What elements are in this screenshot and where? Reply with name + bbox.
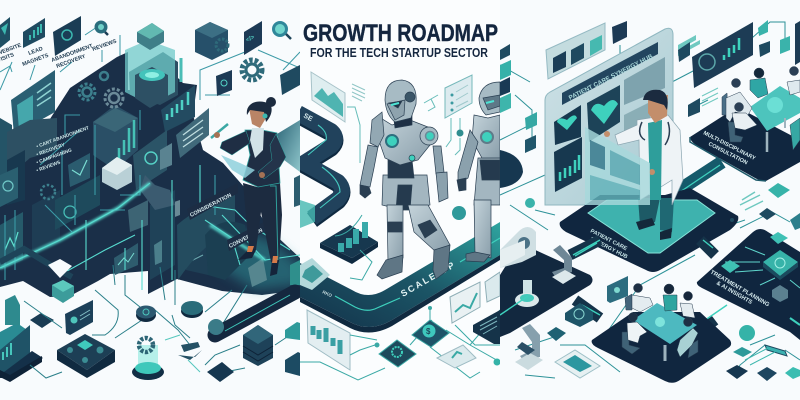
funnel band: cart abandonment list: • CAMPAIGNING [36,147,73,166]
table: consultation [750,86,800,152]
banner: patient care synergy hub: PATIENT CARE SYNERGY HUB [568,53,655,102]
sample analyzer [515,280,539,307]
labels: top categories: MAGNETS [22,53,50,68]
disc at panel left edge [500,150,523,188]
main module platform [57,334,115,378]
title: GROWTH ROADMAP [303,20,498,47]
servers stack [243,325,273,366]
robot two [457,82,500,262]
woman with tablet [211,97,286,276]
microscope: upper [552,245,576,284]
road: s-curve: SE [302,113,314,123]
icon: lead magnets card [23,18,45,48]
label: multi-disciplinary consultation: MULTI-DISCIPLINARY [702,130,757,162]
label: patient care synergy hub: PATIENT CARE [589,228,628,252]
icon strip board [546,21,627,79]
tile: bars [554,137,582,192]
label banners: consideration and conversion [189,193,264,251]
table: bottom team [633,303,697,361]
team: bottom people [622,284,698,358]
panel: marketing funnel [0,16,300,382]
icon: reviews magnifier [94,20,108,35]
chart card: top left [311,72,345,122]
robot one [360,80,450,279]
tool icon [178,342,202,360]
nodes: bottom right row [726,347,800,381]
nodes on treatment platform [721,232,788,302]
card: person profile [65,300,93,335]
platform: lab equipment [500,227,600,337]
chart card: bottom right [450,272,500,323]
connectors: robot area [347,95,460,163]
pipes: glowing inner lines [575,240,727,325]
pipes: hub connections [570,240,715,335]
label: multi-disciplinary consultation: CONSULTATION [707,141,748,166]
labels: top categories [0,38,118,70]
pipes at funnel base [0,249,74,303]
road: s-curve [298,113,342,220]
labels: top categories: ABANDONMENT [51,43,94,64]
icons: top right tiles [758,20,800,65]
dashboard: brain and chart [692,22,753,88]
node: teal hex on road [300,258,330,290]
scanner [500,227,536,268]
platform: doctor base [560,188,738,272]
funnel: glass tower with box [125,23,181,108]
small glass chart [437,345,476,368]
funnel: left block [0,118,12,175]
node: center hexagon [565,303,593,327]
glass board [545,28,673,205]
platform: consultation [690,66,800,181]
front transparent panel [585,127,650,205]
label banners: consideration and conversion: CONSIDERATION [189,193,233,219]
node: small dark diamond [30,313,54,328]
tile: large heart [587,85,620,142]
subtitle: FOR THE TECH STARTUP SECTOR [310,46,488,60]
nodes and connectors [24,265,290,378]
node: teal top-left dot [525,198,535,208]
right small panel [294,175,300,207]
road: main scale-up path [300,222,500,333]
teal cage under road [300,200,315,228]
side panels and lines [678,35,718,117]
platform: treatment planning [697,229,800,340]
node: teal dot [494,358,500,366]
chart card: bottom left [307,310,350,370]
connector lines right panel [500,22,800,378]
funnel: glow bed [215,225,300,290]
node: list tile [740,183,790,210]
glowing gear on base [132,338,164,380]
icon: abandonment card [53,16,81,56]
icons: left strip [500,44,537,153]
connectors: bottom middle [300,250,500,380]
list text lines [352,84,365,101]
platform: bottom team [592,284,731,383]
chip: brain processor [725,247,800,288]
label: treatment planning and AI insights: TREATMENT PLANNING [709,270,771,309]
label: treatment planning and AI insights: & AI INSIGHTS [715,281,753,306]
dark tablet: bottom right [473,310,500,344]
road: main scale-up path: SCALE-UP [399,260,456,299]
label: patient care synergy hub: SYNERGY HUB [589,236,628,260]
node: dark gear diamond [379,340,416,367]
list card: top right [445,75,472,118]
connector: teal pipe to consultation [676,162,722,192]
tile: heart [554,105,581,145]
icons: top right servers, code, coin, gear: </> [245,34,256,44]
label banners: consideration and conversion: CONVERSION [228,228,264,250]
panel: patient care synergy [500,20,800,383]
funnel band: cart abandonment list: • CART ABANDONMENT [36,125,90,150]
node: small hexagon [547,327,566,341]
node: coin diamond [412,320,449,347]
tiles: right pale [624,57,665,135]
funnel glowing circuit lines [0,110,300,290]
small node on road [452,206,466,220]
funnel: screens and machine blocks [0,52,300,287]
team: seated people [722,66,800,150]
microscope lower left [515,324,543,370]
tablet: lab results [555,350,600,378]
connector lines top left [0,27,300,100]
icon: website visits card [0,17,10,48]
node: circle [456,130,464,136]
icon: syringe [745,345,787,365]
labels: top categories: RECOVERY [56,54,87,70]
chips at right bottom [285,322,300,376]
doctor [604,90,683,240]
funnel band: cart abandonment list: • RECOVERY [36,142,66,158]
banner: patient care synergy hub [562,42,658,105]
panel: growth roadmap robots [300,24,500,380]
labels: top categories: REVIEWS [92,38,118,53]
node: teal disc [181,301,203,318]
node: teal circle [739,325,755,341]
funnel band: cart abandonment list [36,126,88,171]
funnel: dark mass [0,52,300,297]
platform: growth bars [320,215,378,264]
nodes: top right of panel [730,208,800,230]
labels: top categories: LEAD [28,46,44,57]
tablet behind woman [277,120,300,172]
icons: gears on funnel [41,72,123,199]
left bottom laptop and bars [0,295,43,382]
funnel band: cart abandonment list: • REVIEWS [36,159,62,174]
chat card [607,276,628,303]
pipe with gear end [208,292,295,335]
node: gear disc [136,306,156,322]
road: main scale-up path: RKO [322,289,333,298]
node: diamond [207,362,234,382]
node: coin diamond: $ [426,327,431,336]
icons: top right servers, code, coin, gear [195,21,300,96]
